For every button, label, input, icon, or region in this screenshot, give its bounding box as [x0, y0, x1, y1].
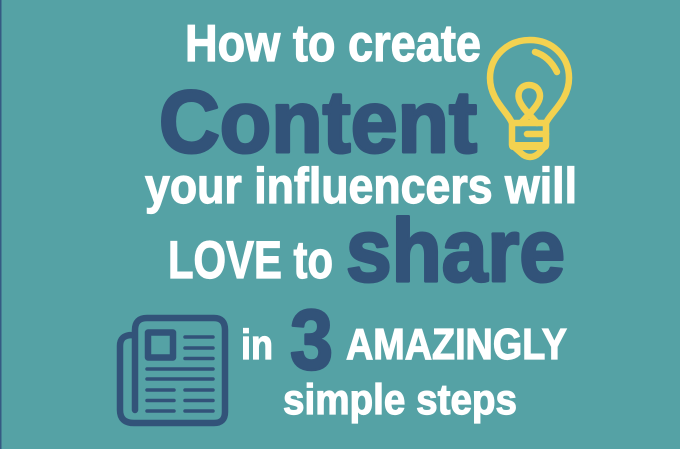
text: AMAZINGLY: AMAZINGLY — [346, 320, 567, 369]
icon: light bulb — [490, 40, 569, 157]
text: your influencers will: your influencers will — [145, 158, 577, 214]
text: share: share — [346, 200, 565, 300]
heading: Content: Content — [159, 72, 477, 171]
text: simple steps: simple steps — [283, 376, 517, 424]
heading: How to create: How to create — [185, 15, 481, 73]
icon: newspaper — [120, 318, 225, 423]
text: LOVE to: LOVE to — [168, 231, 333, 290]
text: in: in — [241, 321, 273, 368]
numeral: 3: 3 — [290, 293, 333, 388]
